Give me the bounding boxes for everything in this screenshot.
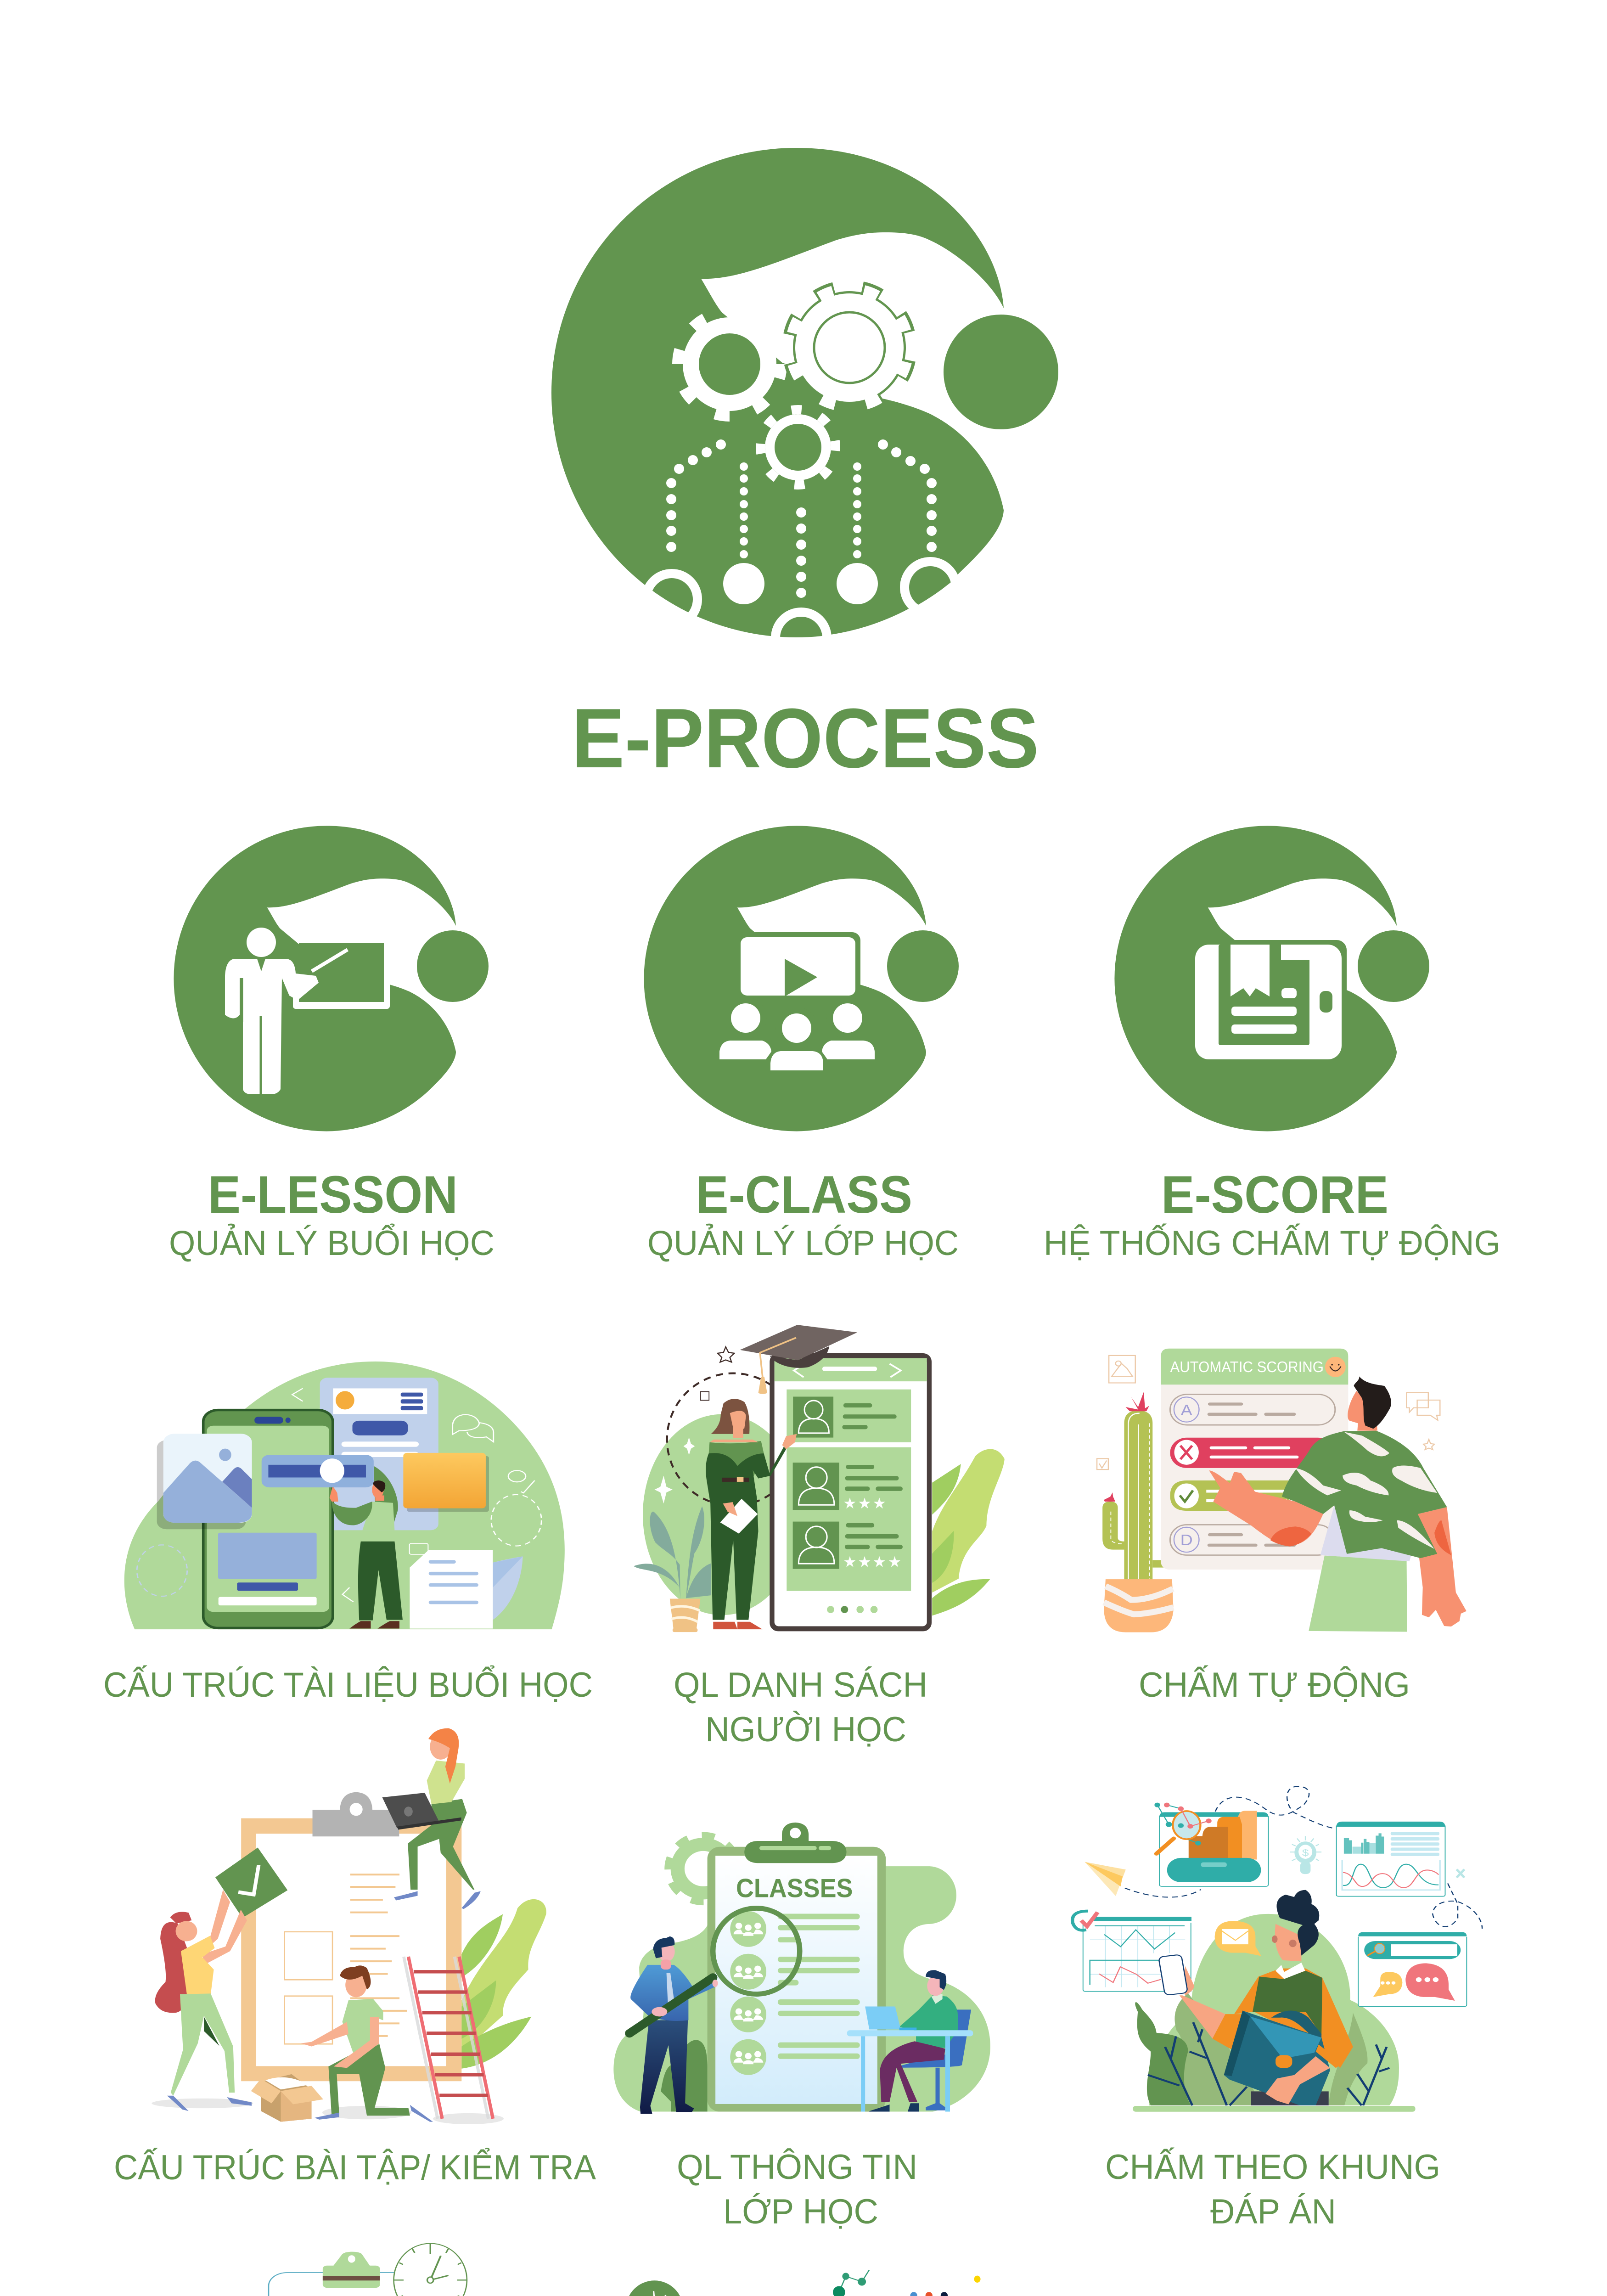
caption: CHẤM THEO KHUNG ĐÁP ÁN — [1105, 2148, 1440, 2231]
option D — [1170, 1525, 1334, 1555]
caption: CHẤM THEO KHUNG ĐÁP ÁN: ĐÁP ÁN — [1210, 2192, 1336, 2231]
icon: cactus in pot — [1102, 1392, 1174, 1632]
panel: scoring card — [1161, 1349, 1348, 1570]
icon: phone with student cards: ★ — [843, 1553, 857, 1570]
person: developer — [330, 1466, 403, 1628]
illustration: lesson document structure — [124, 1362, 565, 1629]
caption: CHẤM TỰ ĐỘNG: CHẤM TỰ ĐỘNG — [1139, 1666, 1410, 1705]
icon: gear — [669, 1836, 737, 1901]
panel: E-LESSON logo — [174, 826, 489, 1131]
icon: phone with student cards: ★ — [888, 1553, 901, 1570]
person: standing man — [629, 1936, 718, 2114]
icon: small gear — [754, 404, 842, 491]
person: teacher woman — [706, 1399, 797, 1629]
icon: clipboard — [269, 2252, 435, 2296]
caption: QL DANH SÁCH NGƯỜI HỌC: QL DANH SÁCH — [674, 1666, 927, 1705]
panel: E-SCORE logo — [1114, 826, 1429, 1131]
person: woman with laptop — [382, 1728, 481, 1909]
dashed flight paths — [1125, 1786, 1482, 1929]
person: man kneeling — [301, 1965, 433, 2122]
person: woman with check card — [152, 1890, 253, 2111]
illustration: class information clipboard — [613, 1823, 990, 2114]
caption: QL THÔNG TIN LỚP HỌC: LỚP HỌC — [723, 2192, 878, 2231]
icon: graduation cap — [740, 1325, 857, 1394]
illustration: answer key scoring — [1073, 1786, 1482, 2112]
panel: chart window — [1337, 1822, 1445, 1896]
panel: scoring card: AUTOMATIC SCORING — [1170, 1358, 1324, 1376]
dots and molecules — [612, 2270, 998, 2296]
icon: dotted network lines — [666, 439, 937, 598]
main logo: E-PROCESS emblem — [551, 148, 1058, 668]
text: QUẢN LÝ LỚP HỌC: QUẢN LÝ LỚP HỌC — [647, 1224, 959, 1263]
illustration: attendance — [110, 2243, 561, 2296]
person: pointing man — [1209, 1376, 1467, 1632]
panel: folder window — [1154, 1803, 1268, 1886]
panel: line graphs window — [1073, 1911, 1191, 1992]
illustration: exercise structure clipboard — [152, 1728, 546, 2124]
caption: QL THÔNG TIN LỚP HỌC — [677, 2148, 917, 2231]
icon: paper plane — [1084, 1862, 1126, 1896]
panel: search window — [1358, 1932, 1467, 2006]
caption: CHẤM THEO KHUNG ĐÁP ÁN: CHẤM THEO KHUNG — [1105, 2148, 1440, 2187]
caption: QL DANH SÁCH NGƯỜI HỌC — [674, 1666, 927, 1749]
caption: QL DANH SÁCH NGƯỜI HỌC: NGƯỜI HỌC — [705, 1710, 906, 1749]
icon: mail bubble — [1215, 1921, 1261, 1956]
icon: phone with student cards: ★ — [843, 1495, 857, 1512]
option D: D — [1180, 1531, 1193, 1548]
icon: leaves — [932, 1449, 1005, 1615]
heading: E-LESSON: E-LESSON — [208, 1165, 458, 1224]
illustration: class status screen — [595, 2270, 1009, 2296]
blob background — [613, 1857, 990, 2112]
heading: E-CLASS: E-CLASS — [696, 1165, 912, 1224]
card: orange note — [403, 1453, 489, 1512]
icon: document with leaf — [410, 1543, 523, 1628]
option A: A — [1181, 1401, 1192, 1419]
icon: teacher at board — [225, 928, 390, 1094]
icons: people groups — [734, 1923, 763, 2064]
icon: check card — [215, 1847, 287, 1918]
panel: E-CLASS logo — [644, 826, 959, 1131]
icon: video class — [719, 932, 875, 1070]
caption: QL THÔNG TIN LỚP HỌC: QL THÔNG TIN — [677, 2148, 917, 2187]
text: QUẢN LÝ BUỔI HỌC: QUẢN LÝ BUỔI HỌC — [169, 1224, 494, 1263]
heading: E-SCORE — [1044, 1165, 1500, 1263]
icon: clipboard — [708, 1823, 886, 2112]
illustration: student list on phone — [634, 1325, 1005, 1632]
icon: lightbulb — [1290, 1836, 1321, 1874]
icon: phone with student cards: ★ — [873, 1553, 886, 1570]
icon: lightbulb badge — [626, 2280, 683, 2296]
icon: phone with student cards — [770, 1353, 932, 1631]
card: image thumbnail — [157, 1434, 252, 1529]
icon: phone — [202, 1409, 334, 1629]
icon: ladder — [404, 1957, 504, 2124]
icon: clipboard — [241, 1792, 461, 2081]
icons: chat and dashed decorations — [137, 1388, 541, 1602]
text: HỆ THỐNG CHẤM TỰ ĐỘNG: HỆ THỐNG CHẤM TỰ ĐỘNG — [1044, 1224, 1500, 1263]
icon: box — [251, 2074, 323, 2122]
heading: E-CLASS — [647, 1165, 959, 1263]
icon: phone with student cards: ★ — [873, 1495, 886, 1512]
icon: network nodes — [645, 557, 958, 637]
icon: leaves — [461, 1899, 546, 2069]
caption: CẤU TRÚC TÀI LIỆU BUỔI HỌC: CẤU TRÚC TÀI LIỆU BUỔI HỌC — [103, 1666, 593, 1705]
icon: lightbulb: $ — [1302, 1847, 1309, 1858]
person: man with briefcase — [1158, 1890, 1353, 2105]
icon: clipboard: CLASSES — [736, 1874, 853, 1903]
background shapes — [1133, 1914, 1415, 2112]
heading: E-SCORE: E-SCORE — [1161, 1165, 1388, 1224]
illustration: automatic scoring — [1097, 1349, 1467, 1632]
icon: phone with student cards: ★ — [858, 1495, 871, 1512]
option A — [1170, 1394, 1335, 1425]
icons: outline decorations — [1097, 1356, 1440, 1469]
caption: CẤU TRÚC BÀI TẬP/ KIỂM TRA: CẤU TRÚC BÀI TẬP/ KIỂM TRA — [114, 2148, 596, 2187]
icon: magnifier — [713, 1908, 800, 1994]
icon: large gear — [777, 276, 921, 420]
decorations: sparkles and star — [654, 1347, 734, 1503]
icon: tablet with bookmark — [1195, 940, 1347, 1059]
icon: phone with student cards: ★ — [858, 1553, 871, 1570]
card: back profile panel — [320, 1378, 438, 1530]
icon: clock — [394, 2243, 467, 2296]
heading: E-LESSON — [169, 1165, 494, 1263]
icon: left gear — [678, 312, 781, 416]
icon: potted plant — [634, 1506, 711, 1632]
card: slider — [262, 1455, 374, 1487]
person: seated man with laptop — [847, 1970, 973, 2112]
option wrong — [1170, 1438, 1334, 1468]
title: E-PROCESS: E-PROCESS — [572, 691, 1039, 785]
option correct — [1170, 1480, 1290, 1511]
